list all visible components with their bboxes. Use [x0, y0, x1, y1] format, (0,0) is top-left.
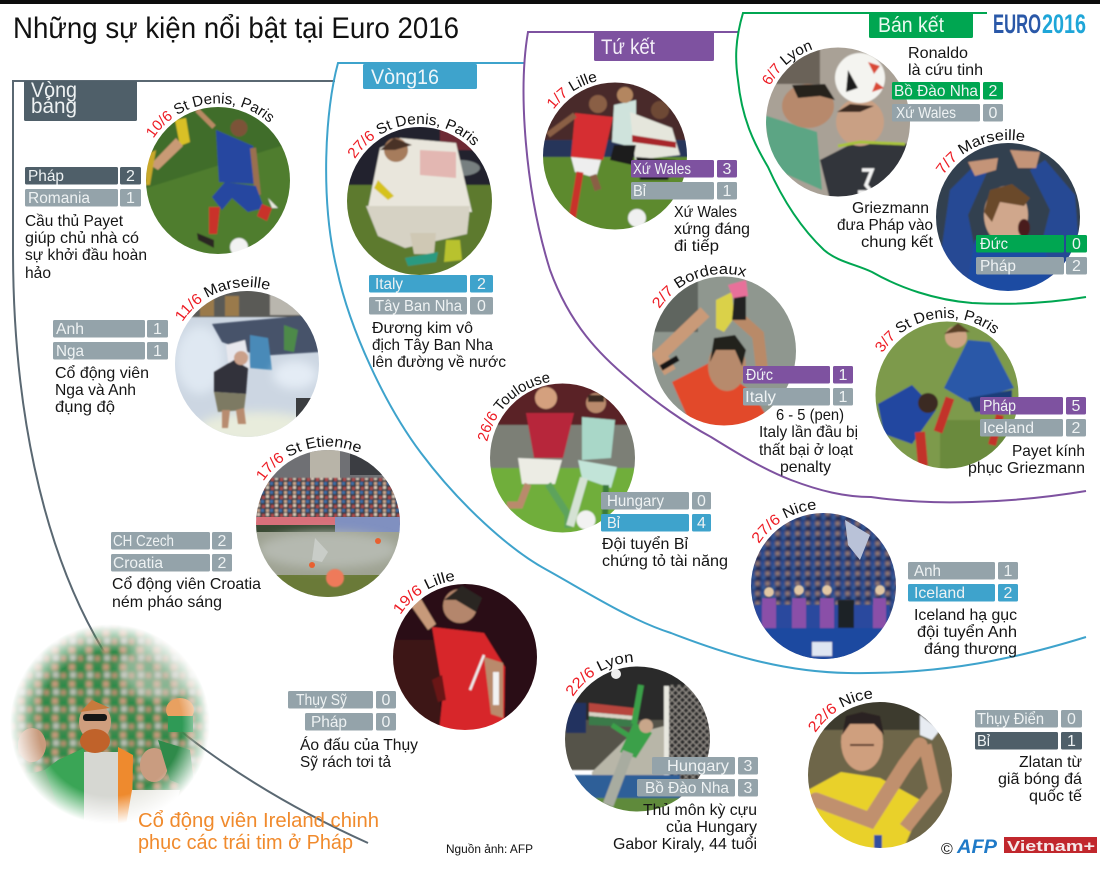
score: CH Czech Croatia: Croatia: [113, 555, 163, 572]
text: fans clash note: [55, 364, 149, 416]
score: Anh Iceland: 2: [1004, 585, 1013, 602]
caption: date and venue: 3/7 St Denis, Paris: [876, 307, 998, 352]
text: penalty note: thất bại ở loạt: [759, 442, 854, 459]
score: Hungary Bỉ: 0: [697, 493, 706, 510]
score: Đức Pháp: 0: [1072, 236, 1081, 253]
text: torn shirt note: Áo đấu của Thụy: [300, 735, 418, 754]
text: Payet Griezmann note: [968, 443, 1085, 477]
text: Spain note: Đương kim vô: [372, 320, 473, 337]
score: Pháp Romania: Romania: [28, 190, 90, 207]
score: Pháp Romania: 2: [126, 168, 135, 185]
text: Belgium note: [602, 535, 728, 570]
photo: Ronaldo heading: [766, 48, 910, 196]
text: Griezmann note: Griezmann: [852, 200, 929, 217]
score: Bồ Đào Nha Xứ Wales: [892, 82, 1003, 122]
score: Anh Nga: Anh: [56, 321, 84, 338]
score: Anh Nga: [53, 320, 168, 360]
text: Payet note: [25, 213, 147, 282]
score: Pháp Romania: 1: [126, 190, 135, 207]
score: Hungary Bỉ: 4: [697, 515, 706, 532]
score: Bồ Đào Nha Xứ Wales: 2: [989, 83, 998, 100]
text: Ireland fans caption: [138, 810, 379, 854]
caption: date and venue: 27/6 Nice: [752, 502, 816, 544]
heading: Tứ kết: Tứ kết: [601, 36, 655, 59]
text: Wales note: Xứ Wales: [674, 204, 737, 221]
score: Xứ Wales Bỉ: [631, 160, 737, 200]
arc: group stage boundary: [13, 81, 368, 843]
text: Payet note: Cầu thủ Payet: [25, 213, 124, 230]
photo: smoke in Marseille: [175, 291, 319, 437]
score: Anh Iceland: 1: [1004, 563, 1013, 580]
heading: Vòng 16: [363, 64, 477, 89]
text: flares note: ném pháo sáng: [112, 594, 222, 611]
score: Anh Iceland: Anh: [914, 563, 941, 580]
text: Ronaldo note: [908, 45, 983, 79]
text: Kiraly note: Thủ môn kỳ cựu: [643, 802, 757, 819]
caption: date and venue: 6/7 Lyon: [762, 42, 812, 84]
score: Pháp Romania: [25, 167, 141, 207]
score: Xứ Wales Bỉ: Bỉ: [633, 183, 646, 200]
match: 17/6 CH Czech Croatia: [111, 436, 400, 611]
text: flares note: Cổ động viên Croatia: [112, 575, 261, 593]
score: Anh Nga: 1: [153, 321, 162, 338]
caption: date and venue: 26/6 Toulouse: [478, 374, 550, 442]
text: Ireland fans caption: phục các trái tim ở Pháp: [138, 832, 353, 854]
heading: Vòng bảng: bảng: [31, 95, 77, 118]
caption: date and venue: 1/7 Lille: [548, 74, 596, 109]
score: Pháp Iceland: 5: [1072, 398, 1081, 415]
caption: date and venue: 10/6 St Denis, Paris: [147, 92, 274, 138]
heading: Tứ kết: [594, 32, 714, 61]
text: torn shirt note: [300, 735, 418, 771]
match: 22/6 Thụy Điển Bỉ: [808, 690, 1082, 848]
score: Pháp Iceland: Pháp: [983, 398, 1016, 415]
score: Hungary Bỉ: Hungary: [607, 493, 664, 510]
score: Pháp Iceland: Iceland: [983, 420, 1034, 437]
text: Iceland note: Iceland hạ gục: [914, 607, 1017, 624]
score: Thụy Sỹ Pháp: 0: [382, 692, 391, 709]
logo: Vietnam+: Vietnam+: [1007, 838, 1095, 855]
score: Thụy Sỹ Pháp: Pháp: [311, 714, 347, 731]
text: penalty note: 6 - 5 (pen): [776, 407, 844, 424]
photo: Kiraly diving: [565, 666, 710, 812]
score: CH Czech Croatia: 2: [218, 555, 227, 572]
text: Kiraly note: Gabor Kiraly, 44 tuổi: [613, 835, 757, 853]
score: Italy Tây Ban Nha: 2: [477, 276, 486, 293]
text: Griezmann note: [837, 200, 934, 251]
caption: date and venue: 7/7 Marseille: [936, 129, 1024, 173]
photo: torn Swiss shirt: [393, 584, 537, 730]
text: Ireland fans caption: Cổ động viên Ireland chinh: [138, 810, 379, 832]
photo: Buffon applauding: [652, 276, 796, 426]
match: 6/7 Bồ Đào Nha Xứ Wales: [762, 42, 1003, 196]
text: Ronaldo note: Ronaldo: [908, 45, 968, 62]
heading: Vòng bảng: [24, 79, 137, 121]
caption: date and venue: 22/6 Nice: [808, 690, 872, 732]
score: Thụy Điển Bỉ: Bỉ: [977, 733, 990, 750]
photo: Griezmann celebrating: [936, 143, 1080, 291]
score: CH Czech Croatia: 2: [218, 533, 227, 550]
score: Thụy Điển Bỉ: [975, 710, 1082, 750]
match: 2/7 Đức Italy: [652, 264, 858, 476]
match: 19/6 Thụy Sỹ Pháp: [288, 572, 537, 771]
score: Đức Italy: 1: [839, 367, 848, 384]
score: Anh Nga: Nga: [56, 343, 84, 360]
text: penalty note: Italy lần đầu bị: [759, 424, 858, 441]
score: Hungary Bỉ: Bỉ: [607, 515, 620, 532]
match: 27/6 Anh Iceland: [751, 502, 1018, 659]
score: Thụy Điển Bỉ: Thụy Điển: [977, 710, 1044, 728]
score: Hungary Bỉ: [601, 492, 711, 532]
text: Spain note: địch Tây Ban Nha: [372, 337, 493, 354]
text: torn shirt note: Sỹ rách tơi tả: [300, 754, 391, 771]
text: Zlatan note: [998, 754, 1082, 805]
text: Belgium note: Đội tuyển Bỉ: [602, 535, 688, 553]
logo: AFP: [941, 837, 997, 858]
score: Đức Pháp: [976, 235, 1087, 275]
photo: Zlatan applauding: [808, 702, 952, 848]
photo: Toulouse duel: [490, 384, 635, 532]
score: Italy Tây Ban Nha: Tây Ban Nha: [375, 298, 462, 315]
text: Payet note: giúp chủ nhà có: [25, 230, 139, 247]
score: CH Czech Croatia: [111, 532, 232, 572]
logo: AFP: AFP: [956, 837, 997, 858]
photo: Payet kicking: [146, 107, 290, 254]
score: Thụy Điển Bỉ: 0: [1067, 711, 1076, 728]
arc: quarter final boundary: [524, 32, 1086, 502]
arc: semi final boundary: [736, 13, 1086, 304]
score: Đức Italy: Italy: [745, 389, 776, 406]
score: Hungary Bồ Đào Nha: [637, 757, 758, 797]
logo: Vietnam+: [1004, 837, 1097, 855]
logo: Euro 2016: EURO: [993, 9, 1041, 39]
text: Payet Griezmann note: phục Griezmann: [968, 460, 1085, 477]
text: flares note: [112, 575, 261, 611]
score: Pháp Romania: Pháp: [28, 168, 64, 185]
score: Hungary Bồ Đào Nha: Hungary: [667, 758, 729, 775]
score: Xứ Wales Bỉ: 1: [723, 183, 732, 200]
score: CH Czech Croatia: CH Czech: [113, 533, 174, 550]
score: Bồ Đào Nha Xứ Wales: 0: [989, 105, 998, 122]
text: Griezmann note: chung kết: [861, 234, 934, 251]
arc: round of 16 boundary: [326, 63, 1086, 673]
photo: Ireland fans: [11, 626, 208, 822]
text: Belgium note: chứng tỏ tài năng: [602, 553, 728, 570]
text: Zlatan note: quốc tế: [1029, 788, 1082, 805]
score: Italy Tây Ban Nha: [369, 275, 493, 315]
logo: AFP: ©: [941, 841, 953, 858]
caption: date and venue: 22/6 Lyon: [566, 654, 633, 696]
match: 26/6 Hungary Bỉ: [478, 374, 728, 570]
score: Đức Italy: [743, 366, 853, 406]
text: Iceland note: [914, 607, 1017, 658]
text: Iceland note: đáng thương: [924, 641, 1017, 658]
text: Zlatan note: giã bóng đá: [998, 771, 1082, 788]
score: Hungary Bồ Đào Nha: 3: [744, 758, 753, 775]
score: Pháp Iceland: 2: [1072, 420, 1081, 437]
heading: Bán kết: Bán kết: [878, 14, 944, 37]
match: 3/7 Pháp Iceland: [876, 307, 1086, 477]
score: Thụy Sỹ Pháp: [288, 691, 396, 731]
text: Kiraly note: [613, 802, 757, 853]
text: Ronaldo note: là cứu tinh: [908, 62, 983, 79]
caption: date and venue: 19/6 Lille: [394, 572, 454, 614]
text: photo source: Nguồn ảnh: AFP: [446, 844, 533, 856]
text: Zlatan note: Zlatan từ: [1019, 754, 1082, 771]
score: Xứ Wales Bỉ: 3: [723, 161, 732, 178]
text: Payet note: sự khởi đầu hoàn: [25, 247, 147, 264]
score: Italy Tây Ban Nha: Italy: [375, 276, 403, 293]
text: Payet note: hảo: [25, 265, 51, 282]
score: Anh Nga: 1: [153, 343, 162, 360]
text: Spain note: [372, 320, 506, 371]
top black rule: [0, 0, 1100, 4]
score: Thụy Sỹ Pháp: 0: [382, 714, 391, 731]
match: 11/6 Anh Nga: [53, 276, 319, 437]
heading: Vòng 16: Vòng16: [371, 66, 439, 89]
caption: date and venue: 17/6 St Etienne: [257, 436, 361, 480]
icon: ball above keeper: [611, 669, 621, 679]
photo: Payet and Griezmann: [876, 322, 1018, 468]
score: Thụy Sỹ Pháp: Thụy Sỹ: [296, 692, 347, 709]
text: fans clash note: đụng độ: [55, 399, 115, 416]
score: Hungary Bồ Đào Nha: 3: [744, 780, 753, 797]
text: Payet Griezmann note: Payet kính: [1012, 443, 1085, 460]
score: Xứ Wales Bỉ: Xứ Wales: [633, 161, 691, 178]
caption: date and venue: 2/7 Bordeaux: [652, 264, 746, 308]
score: Hungary Bồ Đào Nha: Bồ Đào Nha: [645, 780, 729, 797]
match: 10/6 Pháp Romania: [25, 92, 290, 282]
photo: flares at St Etienne: [256, 450, 400, 597]
photo: Lille match: [540, 78, 690, 232]
match: 7/7 Đức Pháp: [837, 129, 1087, 291]
text: fans clash note: Cổ động viên: [55, 364, 149, 382]
text: Spain note: lên đường về nước: [372, 354, 506, 371]
text: penalty note: penalty: [780, 459, 831, 476]
match: 27/6 Italy Tây Ban Nha: [347, 113, 506, 371]
caption: date and venue: 11/6 Marseille: [176, 276, 270, 322]
text: Wales note: đi tiếp: [674, 238, 719, 255]
score: Bồ Đào Nha Xứ Wales: Bồ Đào Nha: [894, 83, 978, 100]
title: Những sự kiện nổi bật tại Euro 2016: [13, 12, 459, 45]
score: Đức Pháp: 2: [1072, 258, 1081, 275]
text: penalty note: [759, 407, 858, 476]
text: Wales note: [674, 204, 750, 255]
text: Iceland note: đội tuyển Anh: [917, 623, 1017, 641]
score: Đức Pháp: Pháp: [980, 258, 1016, 275]
score: Pháp Iceland: [980, 397, 1086, 437]
heading: Bán kết: [869, 13, 973, 38]
score: Italy Tây Ban Nha: 0: [477, 298, 486, 315]
caption: date and venue: 27/6 St Denis, Paris: [348, 113, 478, 158]
heading: Vòng bảng: Vòng: [31, 79, 77, 102]
photo: Iceland team celebrating: [751, 513, 896, 659]
score: Đức Italy: Đức: [746, 367, 773, 384]
photo: Spanish player crouching: [347, 127, 492, 275]
score: Bồ Đào Nha Xứ Wales: Xứ Wales: [896, 105, 956, 122]
score: Đức Pháp: Đức: [980, 236, 1008, 253]
score: Anh Iceland: Iceland: [914, 585, 965, 602]
text: Griezmann note: đưa Pháp vào: [837, 217, 933, 234]
match: 1/7 Xứ Wales Bỉ: [543, 74, 750, 255]
text: fans clash note: Nga và Anh: [55, 382, 136, 399]
score: Anh Iceland: [908, 562, 1018, 602]
text: Wales note: xứng đáng: [674, 221, 750, 238]
text: Kiraly note: của Hungary: [666, 819, 757, 836]
score: Đức Italy: 1: [839, 389, 848, 406]
score: Thụy Điển Bỉ: 1: [1067, 733, 1076, 750]
match: 22/6 Hungary Bồ Đào Nha: [565, 654, 758, 853]
